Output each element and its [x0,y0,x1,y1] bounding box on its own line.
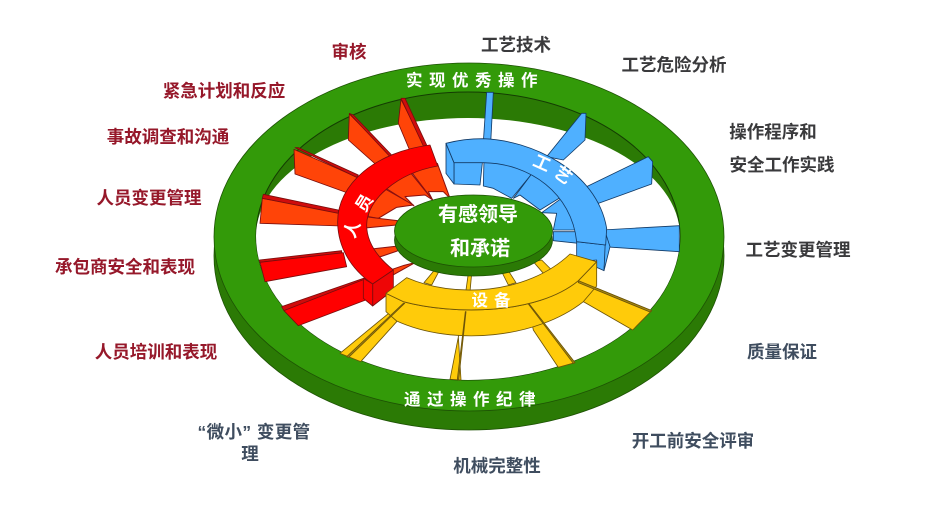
arc label: equipment: 设备 [472,290,516,310]
yellow spoke edge lines [347,281,652,380]
labels: people elements: 紧急计划和反应 [163,81,285,101]
labels: people elements: 审核 [332,42,367,62]
blue outer spokes [483,92,679,252]
yellow arc top face [386,254,597,310]
labels: equipment elements: 理 [241,444,259,464]
blue arc end faces [446,143,454,184]
blue inner spokes [454,160,580,243]
labels: process elements: 工艺危险分析 [622,55,726,75]
arc label: people: 员 [352,191,377,216]
arc label: process: 艺 [550,163,575,188]
red arc end face [373,270,393,306]
labels: process elements: 操作程序和 [729,122,817,142]
blue arc top face [446,139,607,245]
labels: equipment elements [197,342,817,476]
arc label: people [340,191,377,241]
central green hub [394,195,552,276]
labels: equipment elements: 机械完整性 [453,456,541,476]
hub text: 和承诺 [450,237,510,260]
arc label: process [530,151,575,188]
labels: people elements: 承包商安全和表现 [55,257,195,277]
labels: process elements: 安全工作实践 [730,155,835,175]
labels: equipment elements: 质量保证 [747,342,817,362]
panel: people arc (red) [259,98,438,326]
labels: equipment elements: “微小” 变更管 [197,422,311,442]
hub text: 有感领导 [438,203,518,226]
red lower band pieces [365,163,450,277]
ring heading: top: 实现优秀操作 [406,70,544,90]
yellow inner spokes [424,260,552,292]
labels: process elements: 工艺变更管理 [746,240,851,260]
outer green ring [214,63,724,430]
hub text [438,203,518,260]
panel: process arc (blue) [446,92,679,271]
yellow lower band [386,262,597,336]
red outer spokes [260,99,427,226]
labels: process elements: 工艺技术 [481,35,551,55]
yellow outer spokes [340,281,652,380]
labels: equipment elements: 开工前安全评审 [632,431,754,451]
labels: people elements: 人员变更管理 [96,188,202,208]
panel: equipment arc (yellow) [340,254,652,380]
arc label: people: 人 [340,218,364,241]
labels: people elements: 事故调查和沟通 [107,127,230,147]
labels: process elements [481,35,851,260]
red arc top face [338,145,438,284]
labels: people elements: 人员培训和表现 [95,342,217,362]
arc label: process: 工 [530,151,553,176]
ring heading: bottom: 通过操作纪律 [404,390,542,409]
labels: people elements [55,42,367,362]
